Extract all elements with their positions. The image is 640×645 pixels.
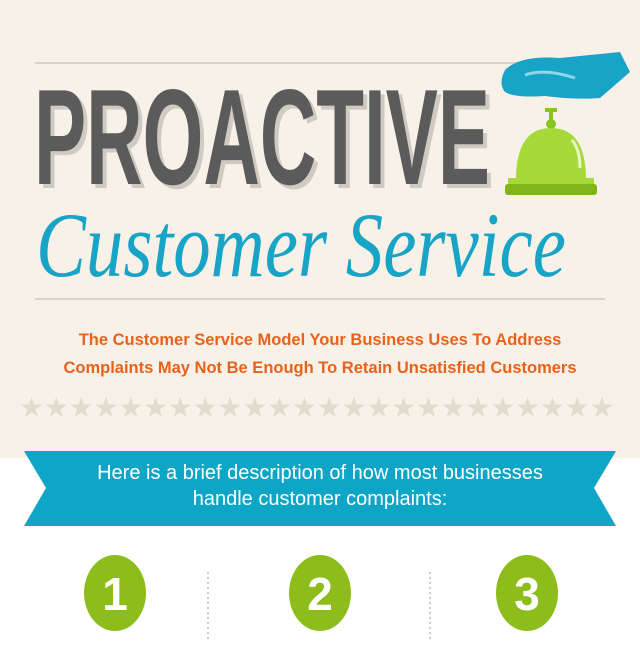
orange tagline — [63, 331, 577, 377]
orange tagline: The Customer Service Model Your Business Uses To Address — [79, 331, 561, 349]
header title block — [34, 52, 630, 300]
ribbon banner: Here is a brief description of how most businesses — [97, 462, 543, 484]
ribbon banner — [24, 451, 616, 526]
icon: hand and service bell — [502, 52, 630, 195]
step 2: 2 — [307, 568, 333, 620]
star rating row: ★★★★★★★★★★★★★★★★★★★★★★★★ — [19, 392, 614, 423]
step 3 — [496, 555, 558, 631]
step 2 — [289, 555, 351, 631]
ribbon banner: handle customer complaints: — [193, 488, 447, 510]
step 1: 1 — [102, 568, 128, 620]
cream header background — [0, 0, 640, 458]
step 3: 3 — [514, 568, 540, 620]
step 1 — [84, 555, 146, 631]
orange tagline: Complaints May Not Be Enough To Retain Unsatisfied Customers — [63, 359, 577, 377]
step numbers — [84, 555, 558, 639]
